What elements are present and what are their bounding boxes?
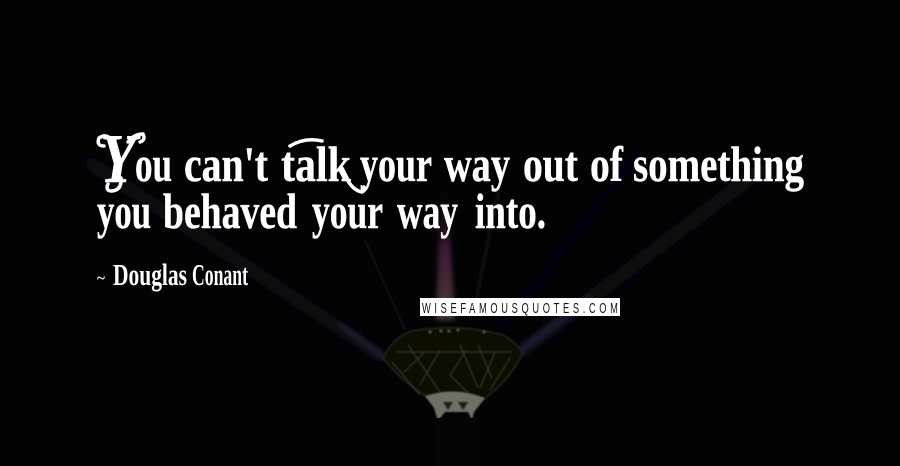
light beams	[90, 150, 760, 357]
logo: wisefamousquotes.com: WISEFAMOUSQUOTES.COM	[422, 300, 618, 317]
tower spire	[436, 185, 455, 320]
quote: line 2	[97, 183, 546, 239]
quote: line 2: you	[97, 183, 151, 239]
quote: line 1	[100, 121, 804, 198]
author: Douglas	[113, 257, 187, 292]
quote: line 1: way	[444, 136, 510, 192]
quote: line 1: out	[523, 136, 578, 192]
tower collar	[425, 391, 485, 421]
quote: line 2: your	[312, 183, 383, 239]
quote: line 2: into.	[475, 183, 546, 239]
tower observation deck	[383, 328, 523, 466]
quote: line 1: talk	[281, 136, 351, 192]
swashes on Y and k	[98, 134, 365, 192]
quote: line 1: ou	[135, 136, 172, 192]
author: Conant	[192, 257, 248, 292]
tower column	[436, 418, 480, 466]
quote: line 1: your	[360, 136, 432, 192]
quote: line 1: Y	[100, 121, 141, 198]
deck lights	[428, 328, 486, 334]
author: ~	[97, 270, 106, 287]
quote: line 1: something	[633, 136, 804, 192]
quote: line 2: behaved	[163, 183, 297, 239]
quote: line 1: can't	[184, 136, 268, 192]
quote: line 1: of	[590, 136, 624, 192]
quote: line 2: way	[397, 183, 458, 239]
